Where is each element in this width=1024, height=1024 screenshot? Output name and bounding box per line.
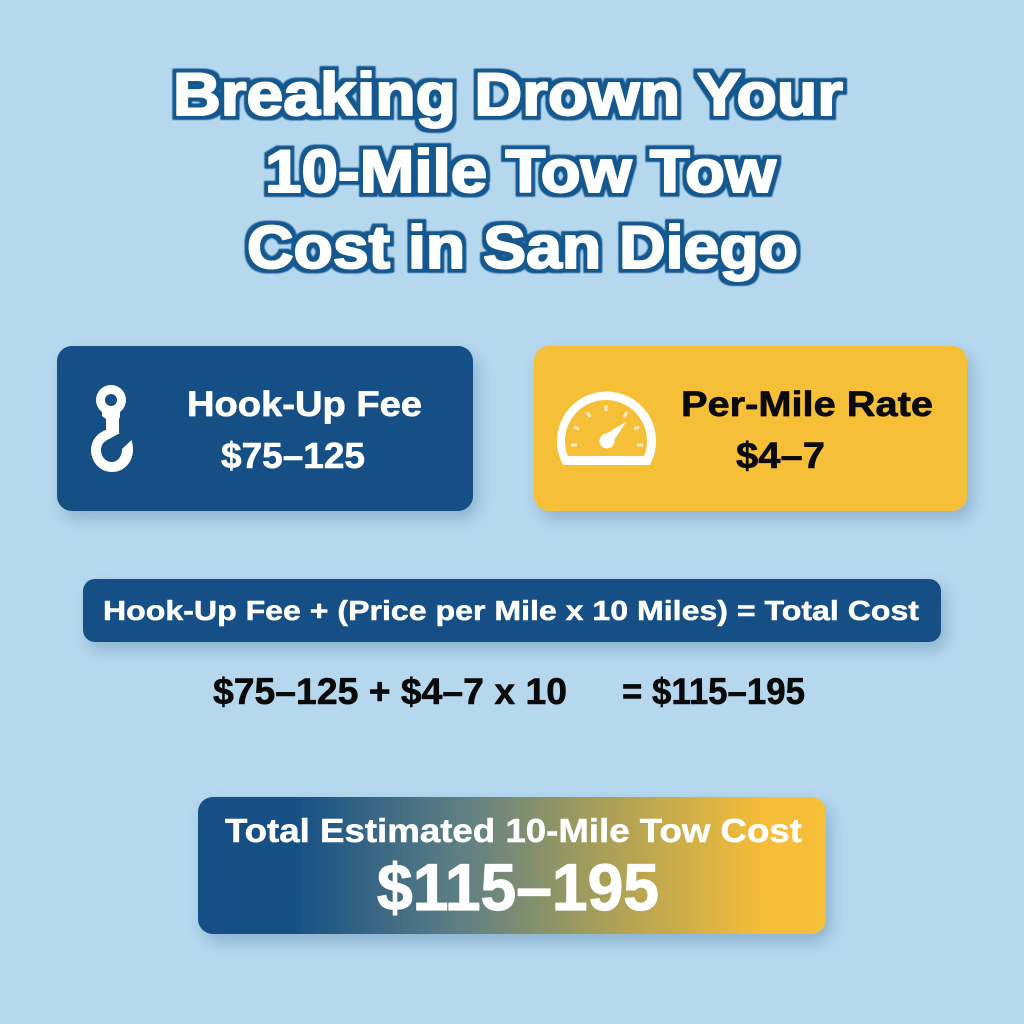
equation: = $115–195 (622, 671, 805, 712)
panel: total estimated cost (198, 797, 826, 934)
value: total estimated cost: $115–195 (377, 850, 659, 924)
label: total estimated cost: Total Estimated 10-Mile Tow Cost (225, 812, 802, 849)
title: 10-Mile Tow Tow (265, 138, 776, 205)
panel: hook-up fee (57, 346, 473, 511)
icon: speedometer (557, 392, 656, 465)
formula bar (83, 579, 941, 642)
label: per-mile rate: Per-Mile Rate (681, 385, 933, 424)
title: Breaking Drown Your (173, 61, 843, 128)
icon: tow hook (91, 385, 133, 472)
equation: $75–125 + $4–7 x 10 (213, 671, 567, 712)
title: Cost in San Diego (247, 214, 798, 281)
title (173, 61, 843, 281)
formula bar: Hook-Up Fee + (Price per Mile x 10 Miles) = Total Cost (103, 595, 919, 626)
equation (213, 671, 805, 712)
label: hook-up fee: Hook-Up Fee (187, 385, 422, 424)
value: per-mile rate: $4–7 (736, 435, 825, 476)
value: hook-up fee: $75–125 (221, 435, 365, 476)
panel: per-mile rate (534, 346, 967, 511)
